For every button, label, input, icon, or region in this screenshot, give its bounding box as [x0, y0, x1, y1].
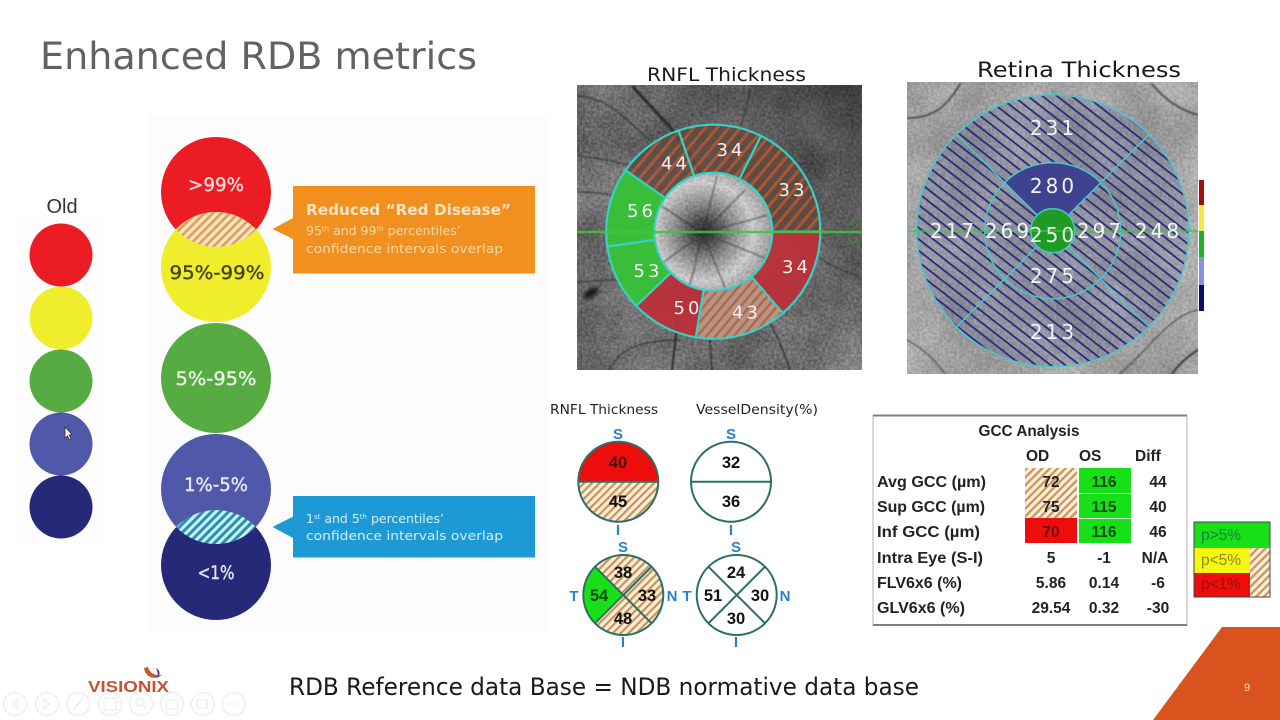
zone values: 231 [1030, 116, 1077, 140]
diagram: RNFL quadrants: N [667, 588, 677, 605]
table column headers: Diff [1135, 448, 1162, 465]
circle: >99%: >99% [188, 174, 244, 196]
table values: -1 [1097, 550, 1111, 567]
table column headers: OS [1079, 448, 1101, 465]
table row labels [877, 474, 986, 617]
callout: blue percentiles: and 5 [320, 511, 360, 526]
panel: enhanced colour scale [148, 115, 550, 632]
diagram: RNFL hemispheres: I [616, 522, 620, 539]
diagram: vessel density quadrants [682, 539, 790, 651]
panel: old colour scale [18, 196, 105, 542]
diagram: RNFL quadrants [569, 539, 677, 651]
colour scale bar [1199, 180, 1204, 311]
zone values: 275 [1030, 264, 1077, 288]
sector values: 56 [627, 201, 656, 222]
old scale circles [30, 224, 92, 538]
table cell colours [1025, 468, 1131, 543]
zone values: 248 [1135, 219, 1182, 243]
heading: Vessel Density: VesselDensity(%) [696, 402, 818, 418]
panel: bottom RNFL and vessel density diagrams [550, 402, 818, 651]
circle: <1% [161, 510, 271, 620]
sector values: 43 [732, 302, 761, 324]
diagram: vessel density quadrants: 51 [704, 587, 722, 605]
diagram: vessel density quadrants: 30 [727, 610, 745, 628]
corner accent [1153, 627, 1280, 720]
diagram: vessel density quadrants: 24 [727, 564, 746, 582]
table values: N/A [1142, 550, 1168, 567]
sector values: 44 [661, 154, 690, 174]
callout: reduced red disease: confidence intervals overlap [306, 241, 503, 256]
table row labels: Sup GCC (µm) [877, 499, 985, 516]
diagram: vessel density quadrants: 30 [751, 587, 769, 605]
callout: reduced red disease: th [322, 225, 329, 233]
table values: 75 [1042, 499, 1060, 516]
diagram: vessel density quadrants: N [780, 588, 790, 605]
sector values: 34 [717, 140, 745, 161]
diagram: vessel density hemispheres: I [729, 522, 733, 539]
diagram: RNFL quadrants: I [621, 634, 625, 651]
diagram: vessel density quadrants: T [682, 588, 692, 605]
callout: reduced red disease: Reduced “Red Disease” [306, 201, 511, 219]
diagram: vessel density quadrants: S [731, 539, 741, 556]
label: Old: Old [46, 196, 78, 218]
legend: p-value colours [1194, 522, 1270, 597]
callout: blue percentiles: 1 [306, 511, 314, 526]
diagram: RNFL hemispheres: 45 [609, 493, 627, 511]
table values: 116 [1091, 474, 1117, 491]
diagram: RNFL hemispheres: 40 [609, 454, 627, 472]
circle: 95%-99%: 95%-99% [170, 262, 264, 284]
scan arrows [848, 220, 858, 244]
callout: blue percentiles [272, 496, 535, 558]
table column headers: OD [1026, 448, 1049, 465]
circle: 95%-99% [161, 212, 271, 322]
sector values [627, 140, 811, 324]
callout: reduced red disease [272, 186, 535, 274]
diagram: RNFL quadrants: S [618, 539, 628, 556]
logo: Visionix: VISIONIX [88, 679, 169, 696]
panel: retina thickness map [907, 82, 1198, 374]
table row labels: Intra Eye (S-I) [877, 550, 983, 567]
icon: mouse cursor [65, 427, 72, 440]
zone values: 250 [1030, 223, 1077, 247]
green scan line [577, 231, 862, 233]
sector values: 53 [634, 261, 662, 282]
callout: reduced red disease: 95 [306, 223, 322, 238]
slide number: 9 [1244, 682, 1250, 694]
callout: blue percentiles: percentiles’ [367, 511, 444, 526]
optic disc [654, 172, 773, 291]
diagram: RNFL quadrants: T [569, 588, 579, 605]
callout: blue percentiles: st [314, 513, 321, 521]
table values: 72 [1042, 474, 1060, 491]
panel: RNFL thickness fundus map [577, 85, 862, 370]
logo: Visionix [88, 667, 169, 696]
table values: 5.86 [1036, 575, 1066, 592]
footer caption: RDB Reference data Base = NDB normative data base [289, 673, 919, 701]
circle: >99% [161, 137, 271, 247]
diagram: RNFL quadrants: 33 [638, 587, 656, 605]
table values [1032, 474, 1169, 617]
circle: 1%-5%: 1%-5% [184, 474, 248, 496]
table values: 0.32 [1089, 600, 1119, 617]
green scan line [907, 230, 1198, 232]
table values: 29.54 [1032, 600, 1071, 617]
RNFL sectors [606, 125, 820, 339]
zone values [930, 116, 1182, 344]
heading: RNFL Thickness small: RNFL Thickness [550, 402, 658, 418]
circle: 1%-5% [161, 434, 271, 544]
diagram: vessel density hemispheres [691, 426, 771, 539]
overlap hatch: red and yellow [176, 212, 256, 247]
slide toolbar [4, 692, 246, 716]
circle: 5%-95% [161, 323, 271, 433]
table values: 5 [1047, 550, 1056, 567]
legend: p-value colours: p<5% [1201, 552, 1241, 569]
table values: 0.14 [1089, 575, 1119, 592]
overlap hatch: blue and navy [176, 510, 256, 544]
callout: blue percentiles: th [360, 513, 367, 521]
table values: 40 [1149, 499, 1167, 516]
callout: reduced red disease: and 99 [329, 223, 377, 238]
table values: 115 [1091, 499, 1117, 516]
sector values: 33 [779, 180, 807, 201]
circle: <1%: <1% [198, 562, 234, 584]
table row labels: FLV6x6 (%) [877, 575, 962, 592]
table values: 44 [1149, 474, 1167, 491]
zone values: 280 [1030, 174, 1077, 198]
diagram: RNFL quadrants: 54 [590, 587, 609, 605]
sector values: 50 [674, 298, 702, 319]
heading: Retina Thickness: Retina Thickness [977, 58, 1181, 82]
callout: reduced red disease: th [376, 225, 384, 233]
diagram: RNFL quadrants: 38 [614, 564, 632, 582]
circle: 5%-95%: 5%-95% [176, 368, 256, 390]
diagram: RNFL hemispheres: S [613, 426, 623, 443]
table row labels: GLV6x6 (%) [877, 600, 965, 617]
zone values: 269 [985, 219, 1032, 243]
callout: reduced red disease: percentiles’ [384, 223, 461, 238]
zone values: 297 [1077, 219, 1124, 243]
callout: blue percentiles: confidence intervals overlap [306, 528, 503, 543]
table: GCC analysis [873, 416, 1187, 625]
table values: -6 [1151, 575, 1165, 592]
table column headers [1026, 448, 1162, 465]
sector values: 34 [782, 257, 811, 278]
legend: p-value colours: p<1% [1201, 576, 1241, 593]
table values: 46 [1149, 524, 1167, 541]
macula grid [917, 95, 1189, 367]
diagram: vessel density hemispheres: S [726, 426, 736, 443]
zone values: 217 [930, 219, 977, 243]
table values: -30 [1147, 600, 1169, 617]
diagram: RNFL quadrants: 48 [614, 610, 632, 628]
table row labels: Avg GCC (µm) [877, 474, 986, 491]
dark lesion mark [581, 285, 601, 301]
table title: GCC Analysis [978, 423, 1080, 440]
heading: RNFL Thickness: RNFL Thickness [647, 64, 806, 86]
title: Enhanced RDB metrics [40, 35, 477, 78]
table values: 70 [1042, 524, 1060, 541]
table row labels: Inf GCC (µm) [877, 524, 980, 541]
diagram: vessel density quadrants: I [734, 634, 738, 651]
diagram: vessel density hemispheres: 32 [722, 454, 740, 472]
diagram: vessel density hemispheres: 36 [722, 493, 740, 511]
legend: p-value colours: p>5% [1201, 527, 1241, 544]
diagram: RNFL hemispheres [578, 426, 658, 539]
zone values: 213 [1030, 320, 1077, 344]
table values: 116 [1091, 524, 1117, 541]
